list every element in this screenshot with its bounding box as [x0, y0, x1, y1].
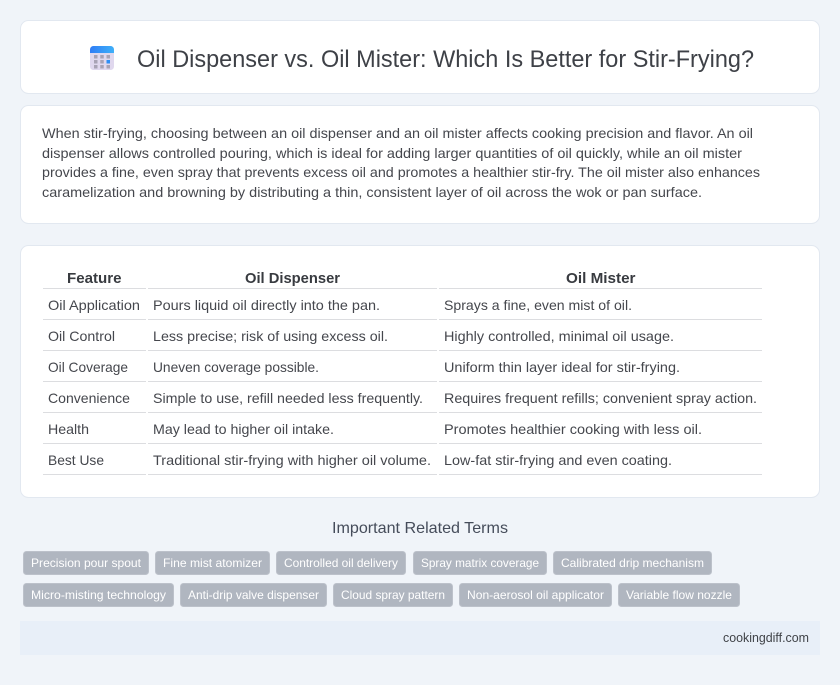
- tag: [334, 584, 452, 606]
- panel: intro paragraph: caramelization and browning by distributing a thin, consistent layer of oil across the wok or pan surface.: [42, 184, 702, 200]
- tag: Precision pour spout: [31, 556, 142, 570]
- row: convenience: [48, 390, 757, 406]
- row: convenience: Simple to use, refill needed less frequently.: [153, 390, 423, 406]
- row: oil application: Pours liquid oil directly into the pan.: [153, 297, 380, 313]
- icon: calendar grid: [90, 46, 114, 70]
- tag: Controlled oil delivery: [284, 556, 398, 570]
- tag: Non-aerosol oil applicator: [467, 588, 604, 602]
- row: convenience: Requires frequent refills; convenient spray action.: [444, 390, 757, 406]
- tag: [276, 552, 406, 574]
- footer source text: cookingdiff.com: [723, 630, 809, 645]
- row: oil coverage: Uneven coverage possible.: [153, 359, 319, 375]
- row: oil control: Highly controlled, minimal oil usage.: [444, 328, 674, 344]
- tag: Spray matrix coverage: [421, 556, 539, 570]
- row: best use: Best Use: [48, 452, 104, 468]
- tag: Anti-drip valve dispenser: [188, 588, 319, 602]
- row: best use: [48, 452, 672, 468]
- tag: [180, 584, 326, 606]
- row: oil coverage: Oil Coverage: [48, 359, 128, 375]
- row: oil application: Sprays a fine, even mist of oil.: [444, 297, 632, 313]
- table header row: Oil Dispenser: [245, 270, 340, 287]
- row: health: [48, 421, 702, 437]
- row: oil application: [48, 297, 632, 313]
- tag: Micro-misting technology: [31, 588, 166, 602]
- heading: important related terms: Important Related Terms: [332, 520, 508, 537]
- row: health: May lead to higher oil intake.: [153, 421, 334, 437]
- row: oil coverage: [48, 359, 680, 375]
- table header row: Feature: [67, 270, 122, 287]
- tag: [414, 552, 546, 574]
- panel: comparison table: [20, 246, 820, 498]
- title: Oil Dispenser vs. Oil Mister: Which Is Better for Stir-Frying?: [137, 46, 754, 73]
- row: oil control: Oil Control: [48, 328, 115, 344]
- footer bar: [20, 621, 820, 655]
- tag: [24, 552, 148, 574]
- header panel: [20, 20, 820, 94]
- tag: Cloud spray pattern: [341, 588, 445, 602]
- row: best use: Low-fat stir-frying and even coating.: [444, 452, 672, 468]
- row: oil coverage: Uniform thin layer ideal for stir-frying.: [444, 359, 680, 375]
- table header row: [67, 270, 636, 287]
- row: oil control: [48, 328, 674, 344]
- row: health: Promotes healthier cooking with less oil.: [444, 421, 702, 437]
- tag: [618, 584, 740, 606]
- tag group: related terms: [24, 552, 740, 606]
- tag: Calibrated drip mechanism: [561, 556, 704, 570]
- tag: Fine mist atomizer: [163, 556, 262, 570]
- row: health: Health: [48, 421, 89, 437]
- panel: intro paragraph: [20, 106, 820, 224]
- table header row: Oil Mister: [566, 270, 636, 287]
- tag: [24, 584, 174, 606]
- row: oil application: Oil Application: [48, 297, 140, 313]
- tag: [460, 584, 612, 606]
- panel: intro paragraph: dispenser allows controlled pouring, which is ideal for adding larger quantities of oil quickly, while an oil mister: [42, 145, 742, 161]
- panel: intro paragraph: provides a fine, even spray that prevents excess oil and promotes a healthier stir-fry. The oil mister also enhances: [42, 164, 760, 180]
- tag: [554, 552, 712, 574]
- panel: intro paragraph: When stir-frying, choosing between an oil dispenser and an oil mister affects cooking precision and flavor. An oil: [42, 125, 753, 141]
- row: best use: Traditional stir-frying with higher oil volume.: [153, 452, 431, 468]
- row: convenience: Convenience: [48, 390, 130, 406]
- tag: [156, 552, 270, 574]
- tag: Variable flow nozzle: [626, 588, 732, 602]
- row: oil control: Less precise; risk of using excess oil.: [153, 328, 388, 344]
